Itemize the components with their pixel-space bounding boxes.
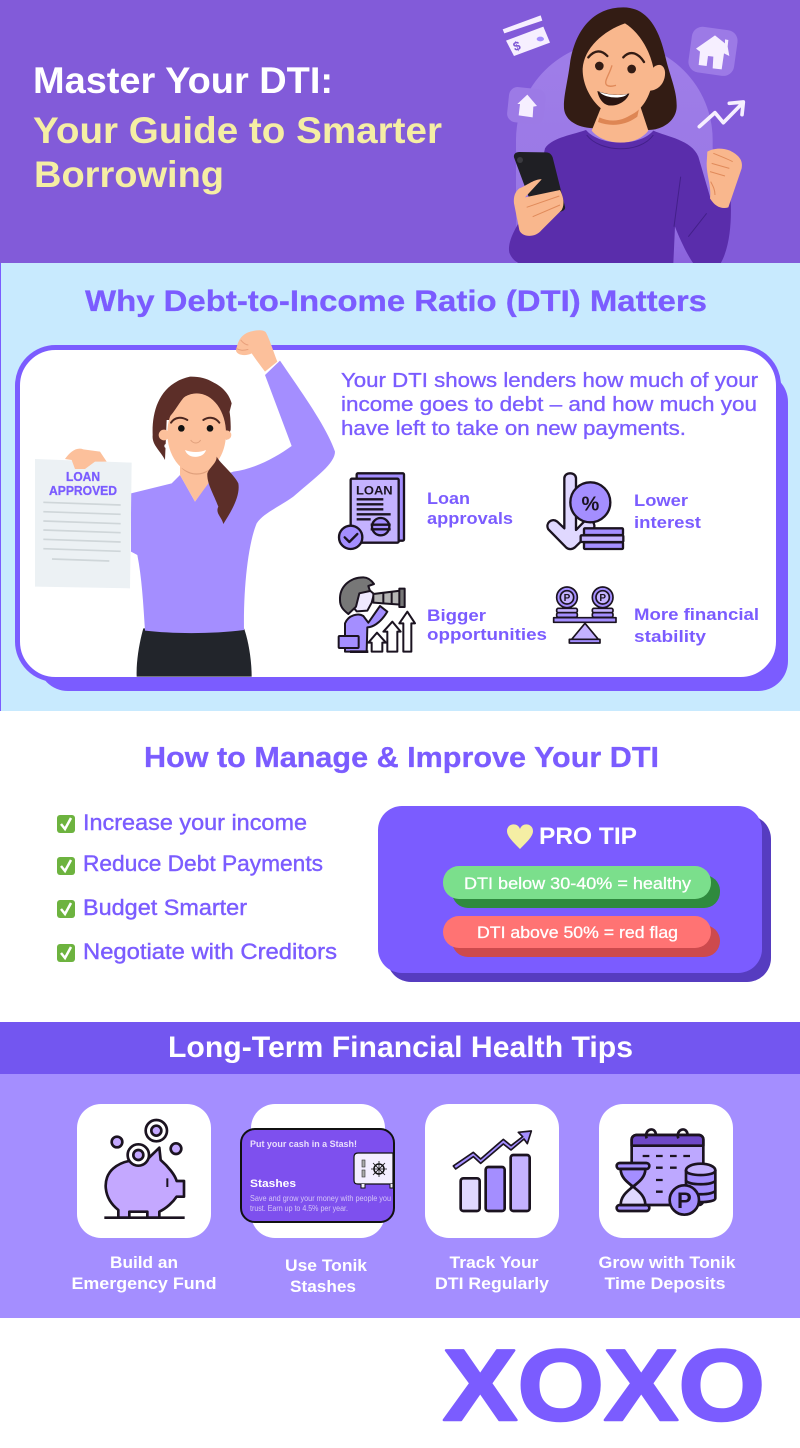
panel: long-term tips	[0, 1022, 800, 1318]
pill: red flag: DTI above 50% = red flag	[477, 923, 678, 942]
heading bar	[0, 1022, 800, 1074]
callout: pro tip	[378, 806, 771, 982]
intro text: have left to take on new payments.	[341, 418, 686, 440]
section background	[0, 711, 800, 1022]
panel: how to manage	[0, 711, 800, 1022]
checklist	[57, 810, 337, 964]
label	[435, 1253, 550, 1293]
intro text	[341, 370, 758, 440]
label: bigger opportunities: Bigger	[427, 606, 486, 625]
item: reduce debt payments: Reduce Debt Payments	[83, 851, 323, 876]
title: Your Guide to Smarter	[33, 110, 442, 151]
icon: safe	[354, 1153, 393, 1188]
stash card: trust. Earn up to 4.5% per year.	[250, 1204, 348, 1213]
logo: XOXO: XOXO	[443, 1330, 765, 1442]
icon: lower interest: %	[581, 494, 599, 516]
illustration: woman with phone: $	[511, 39, 522, 54]
icon: calendar, hourglass and coins: P	[677, 1188, 692, 1213]
pro tip heading: PRO TIP	[539, 823, 637, 850]
heading: How to Manage & Improve Your DTI	[144, 742, 659, 774]
illustration: woman with loan approval	[35, 330, 335, 677]
label: DTI Regularly	[435, 1274, 550, 1293]
icon: loan document	[339, 473, 404, 549]
label: Time Deposits	[604, 1274, 726, 1293]
stash card	[241, 1129, 394, 1222]
item: increase your income: Increase your income	[83, 810, 307, 835]
pill: red flag	[443, 916, 720, 957]
icon: calendar, hourglass and coins	[617, 1129, 715, 1215]
tile: track DTI	[425, 1104, 559, 1293]
label: loan approvals	[427, 489, 513, 528]
pill: healthy	[443, 866, 720, 908]
icon: balance with coins: P	[599, 593, 606, 604]
label: loan approvals: approvals	[427, 509, 513, 528]
label: loan approved on document: LOAN	[66, 470, 100, 484]
intro text: Your DTI shows lenders how much of your	[341, 370, 758, 392]
card shadow	[38, 372, 788, 691]
label: bigger opportunities	[427, 606, 547, 644]
tile: emergency fund	[72, 1104, 216, 1293]
label	[285, 1256, 368, 1296]
icon: bigger opportunities	[339, 577, 415, 652]
label: lower interest: interest	[634, 513, 701, 532]
label: more financial stability: More financial	[634, 605, 759, 624]
item: negotiate with creditors: Negotiate with Creditors	[83, 939, 337, 964]
icon: yellow heart	[507, 824, 533, 849]
icon: balance with coins	[554, 587, 616, 643]
icon: balance with coins: P	[564, 593, 571, 604]
label: loan approved on document: APPROVED	[49, 484, 117, 498]
label: bigger opportunities: opportunities	[427, 625, 547, 644]
icon: piggy bank	[104, 1120, 185, 1218]
label: loan approvals: Loan	[427, 489, 470, 508]
section background	[0, 1074, 800, 1318]
icon: loan document: LOAN	[356, 484, 393, 498]
icon: lower interest	[547, 473, 623, 549]
title	[33, 60, 442, 195]
stash card: Stashes	[250, 1178, 296, 1190]
label: Emergency Fund	[72, 1274, 216, 1293]
label: Build an	[110, 1253, 178, 1272]
item: budget smarter: Budget Smarter	[83, 895, 247, 920]
pill: healthy: DTI below 30-40% = healthy	[464, 874, 692, 893]
panel: why DTI matters	[0, 263, 800, 711]
label: lower interest	[634, 491, 701, 532]
stash card: Save and grow your money with people you	[250, 1194, 391, 1203]
label: more financial stability	[634, 605, 759, 646]
section background	[0, 263, 800, 711]
label	[598, 1253, 736, 1293]
intro text: income goes to debt – and how much you	[341, 394, 757, 416]
label: loan approved on document	[49, 470, 117, 498]
panel: header	[0, 0, 800, 263]
label: lower interest: Lower	[634, 491, 688, 510]
stash card: Put your cash in a Stash!	[250, 1139, 357, 1149]
title: Master Your DTI:	[33, 60, 333, 101]
tile: tonik stashes	[241, 1104, 394, 1296]
label: Use Tonik	[285, 1256, 368, 1275]
white card	[18, 348, 778, 680]
label: more financial stability: stability	[634, 627, 707, 646]
heading: Long-Term Financial Health Tips	[168, 1031, 633, 1064]
label: Stashes	[290, 1277, 356, 1296]
label: Grow with Tonik	[598, 1253, 736, 1272]
illustration: woman with phone	[503, 7, 743, 263]
title: Borrowing	[34, 154, 224, 195]
label: Track Your	[450, 1253, 539, 1272]
tile: time deposits	[598, 1104, 736, 1293]
header background	[0, 0, 800, 263]
heading: Why Debt-to-Income Ratio (DTI) Matters	[85, 285, 707, 318]
label	[72, 1253, 216, 1293]
icon: growth chart	[453, 1131, 531, 1211]
